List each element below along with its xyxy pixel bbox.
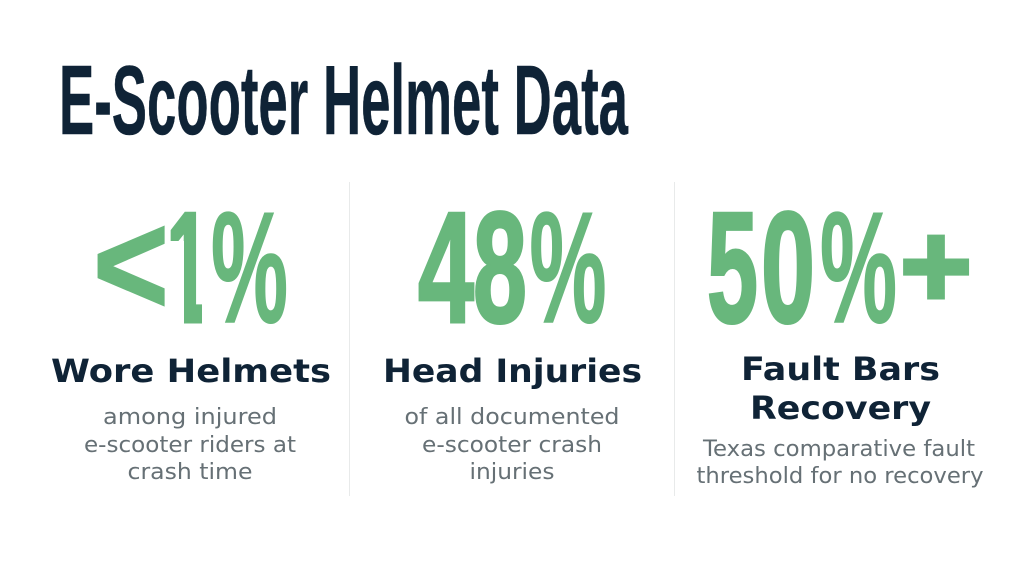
description: head injuries: injuries	[470, 459, 554, 485]
description: helmets: crash time	[128, 459, 252, 485]
description: helmets: e-scooter riders at	[84, 432, 296, 458]
stat: 48 percent	[418, 180, 606, 356]
heading: fault bars recovery	[741, 350, 940, 427]
panel: helmet use	[52, 211, 330, 480]
stat: 50 percent plus	[707, 180, 972, 356]
stat: less than 1 percent: 1	[166, 180, 210, 356]
stat: less than 1 percent: %	[211, 180, 288, 356]
panel: fault threshold	[696, 180, 984, 489]
heading: fault bars recovery: Recovery	[750, 389, 931, 427]
description: fault threshold: Texas comparative fault	[702, 436, 975, 462]
panel: head injuries	[383, 180, 642, 485]
heading: fault bars recovery: Fault Bars	[741, 350, 940, 388]
description: head injuries	[404, 404, 620, 485]
description: helmets	[84, 404, 296, 485]
stat: 50 percent plus: %	[820, 180, 897, 356]
stat: 48 percent: 8	[473, 180, 527, 356]
description: head injuries: e-scooter crash	[422, 432, 602, 458]
description: fault threshold: threshold for no recovery	[696, 463, 984, 489]
stat: 50 percent plus: 5	[707, 180, 758, 356]
description: fault threshold	[696, 436, 984, 489]
stat: 48 percent: %	[530, 180, 606, 356]
stat: less than 1 percent	[98, 211, 286, 324]
description: helmets: among injured	[103, 404, 277, 430]
description: head injuries: of all documented	[404, 404, 620, 430]
stat: 48 percent: 4	[418, 180, 474, 356]
stat: 50 percent plus: +	[900, 199, 972, 333]
heading: head injuries: Head Injuries	[383, 352, 642, 390]
stat: 50 percent plus: 0	[761, 180, 815, 356]
stat: less than 1 percent: <	[93, 183, 169, 345]
heading: wore helmets: Wore Helmets	[51, 352, 331, 390]
